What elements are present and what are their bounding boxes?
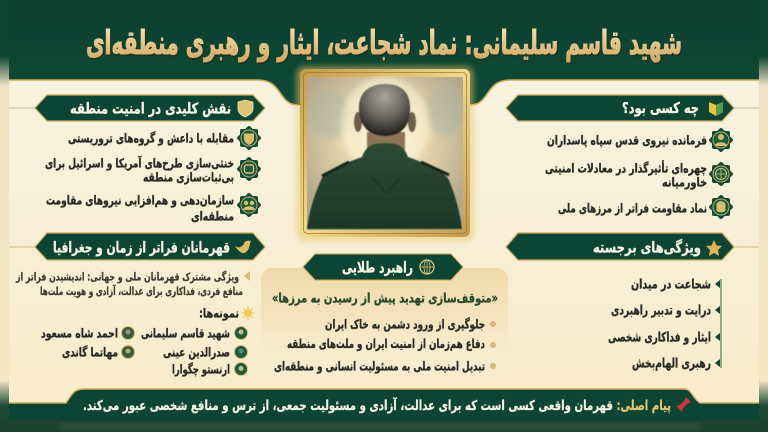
item: influential figure: چهره‌ای تأثیرگذار در معادلات امنیتی bbox=[545, 160, 707, 176]
section: heroes beyond time and geography bbox=[9, 233, 265, 376]
ribbon: outstanding traits: ویژگی‌های برجسته bbox=[593, 238, 701, 256]
item: fighting ISIS bbox=[68, 125, 262, 151]
ribbon: key role bbox=[9, 95, 265, 121]
item: organizing resistance forces: سازمان‌دهی و هم‌افزایی نیروهای مقاومت bbox=[46, 192, 234, 208]
item: neutralizing plans: خنثی‌سازی طرح‌های آمریکا و اسرائیل برای bbox=[45, 156, 234, 170]
section: outstanding traits bbox=[506, 233, 759, 372]
ribbon: key role: نقش کلیدی در امنیت منطقه bbox=[70, 100, 231, 118]
bottom message band bbox=[0, 389, 768, 432]
item: neutralizing plans bbox=[45, 156, 262, 184]
item: organizing resistance forces: منطقه‌ای bbox=[191, 208, 234, 224]
icon: pin bbox=[676, 397, 691, 412]
ribbon: golden strategy: راهبرد طلایی bbox=[342, 258, 413, 276]
example: Qasem Soleimani: شهید قاسم سلیمانی bbox=[141, 326, 230, 340]
text: shared trait bbox=[15, 270, 250, 298]
ribbon: golden strategy bbox=[303, 254, 463, 280]
bullet: transform national security: تبدیل امنیت ملی به مسئولیت انسانی و منطقه‌ای bbox=[274, 358, 485, 374]
right blurred edge bbox=[759, 0, 768, 432]
header band bbox=[9, 0, 759, 105]
section: golden strategy bbox=[261, 254, 508, 376]
left blurred edge bbox=[0, 0, 9, 432]
bullet: simultaneous defense: دفاع هم‌زمان از امنیت ایران و ملت‌های منطقه bbox=[287, 336, 485, 351]
main message: پیام اصلی: قهرمان واقعی کسی است که برای عدالت، آزادی و مسئولیت جمعی، از ترس و منافع شخصی عبور می‌کند. bbox=[83, 397, 671, 414]
ribbon: heroes bbox=[9, 233, 265, 260]
example: Sadriddin Ayni: صدرالدین عینی bbox=[163, 344, 230, 360]
timeline list: شجاعت در میدان bbox=[631, 278, 711, 292]
timeline list: رهبری الهام‌بخش bbox=[632, 356, 711, 372]
section: who was he bbox=[506, 95, 759, 220]
heading: examples: نمونه‌ها: bbox=[199, 306, 239, 320]
text: shared trait: منافع فردی، فداکاری برای عدالت، آزادی و هویت ملت‌ها bbox=[40, 284, 243, 298]
ribbon: who was he: چه کسی بود؟ bbox=[622, 99, 699, 118]
item: influential figure bbox=[545, 160, 734, 190]
ribbon: who was he bbox=[506, 95, 759, 121]
gold panel bbox=[261, 268, 508, 376]
item: influential figure: خاورمیانه bbox=[662, 174, 707, 190]
bullet: prevent enemy entry: جلوگیری از ورود دشمن به خاک ایران bbox=[325, 316, 485, 332]
item: Quds force commander bbox=[547, 127, 734, 153]
quote: «متوقف‌سازی تهدید پیش از رسیدن به مرزها» bbox=[272, 292, 498, 306]
text: shared trait: ویژگی مشترک قهرمانان ملی و جهانی: اندیشیدن فراتر از bbox=[15, 270, 239, 284]
portrait frame bbox=[296, 66, 474, 241]
soldier silhouette bbox=[307, 84, 462, 229]
item: fighting ISIS: مقابله با داعش و گروه‌های تروریستی bbox=[68, 130, 234, 146]
item: organizing resistance forces bbox=[46, 192, 262, 224]
section: key role in regional security bbox=[9, 95, 265, 224]
timeline list bbox=[608, 278, 721, 372]
item: symbol of resistance bbox=[558, 194, 734, 220]
timeline list: درایت و تدبیر راهبردی bbox=[611, 304, 711, 318]
example: Mahatma Gandhi: مهاتما گاندی bbox=[62, 344, 118, 360]
item: symbol of resistance: نماد مقاومت فراتر از مرزهای ملی bbox=[558, 200, 707, 216]
timeline list: ایثار و فداکاری شخصی bbox=[608, 330, 711, 346]
ribbon: outstanding traits bbox=[506, 233, 759, 260]
example: Ernesto Guevara: ارنستو چگوارا bbox=[172, 362, 230, 376]
item: neutralizing plans: بی‌ثبات‌سازی منطقه bbox=[143, 170, 234, 184]
example: Ahmad Shah Massoud: احمد شاه مسعود bbox=[41, 326, 118, 340]
item: Quds force commander: فرمانده نیروی قدس سپاه پاسداران bbox=[547, 132, 707, 148]
ribbon: heroes: قهرمانان فراتر از زمان و جغرافیا bbox=[53, 238, 230, 256]
